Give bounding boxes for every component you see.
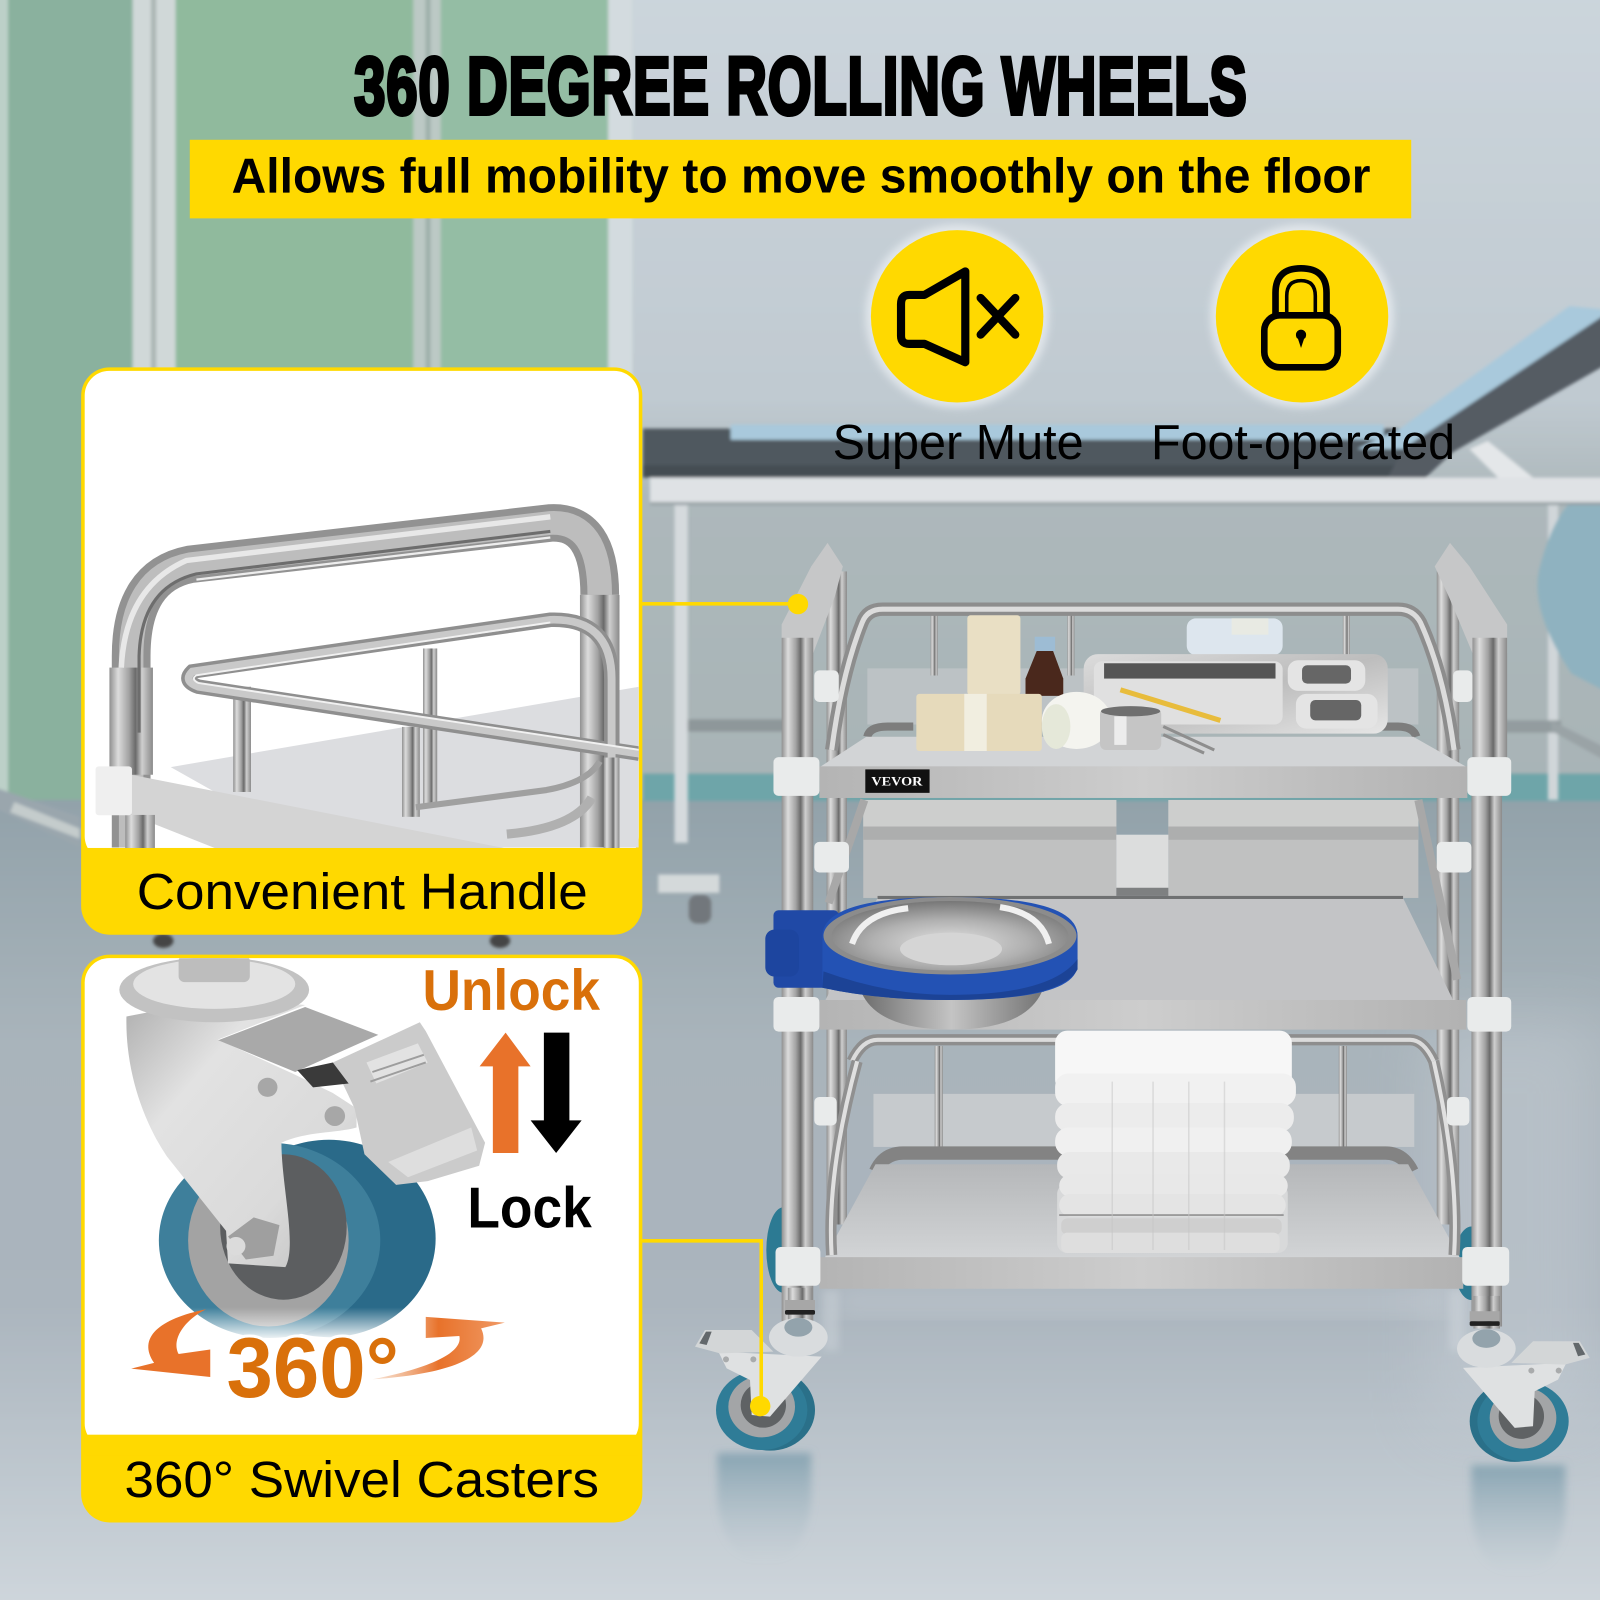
subtitle banner: Allows full mobility to move smoothly on the floor — [232, 149, 1370, 203]
gauze roll — [1042, 692, 1111, 749]
pack tag — [1232, 618, 1268, 635]
icon: padlock — [1210, 224, 1394, 408]
tray — [1084, 654, 1388, 734]
left handle — [782, 543, 843, 653]
caster photo — [119, 955, 505, 1379]
caption: Convenient Handle — [137, 863, 588, 920]
label: super mute: Super Mute — [833, 416, 1084, 470]
leader line: caster — [641, 1241, 770, 1416]
subtitle banner — [190, 140, 1411, 218]
saline pack — [1187, 618, 1283, 655]
leader line: handle — [641, 594, 808, 614]
caption: 360° Swivel Casters — [124, 1451, 599, 1508]
middle shelf — [819, 800, 1466, 1030]
steel cup — [1100, 706, 1161, 750]
floor light shading — [837, 1020, 1600, 1429]
floor reflections — [717, 1290, 1565, 1573]
tan bandage roll — [916, 694, 1042, 751]
background: examination table — [153, 306, 1600, 948]
bottle — [1026, 637, 1063, 696]
panel: convenient handle — [81, 367, 642, 935]
towels — [1055, 1031, 1296, 1253]
icon: super mute — [865, 224, 1049, 408]
swivel arrow right — [372, 1317, 505, 1379]
brand label — [865, 769, 930, 793]
upright bandage — [967, 615, 1020, 695]
tube clamps — [773, 670, 1511, 1286]
medical items — [916, 615, 1388, 753]
lower tier back panel and rails — [824, 1040, 1460, 1258]
blue bowl holder — [765, 897, 1078, 1030]
brand label: VEVOR — [871, 775, 923, 789]
title: 360 DEGREE ROLLING WHEELS — [354, 40, 1247, 131]
lock label: Lock — [467, 1177, 592, 1241]
trolley back posts — [827, 571, 1459, 1224]
top tier rails and shelf — [819, 609, 1467, 798]
right handle — [1435, 543, 1507, 653]
unlock label: Unlock — [422, 959, 600, 1023]
front posts — [782, 638, 1507, 1327]
tweezers — [1163, 727, 1214, 753]
handle photo — [96, 517, 639, 849]
panel: 360 swivel casters — [81, 955, 642, 1522]
trolley — [695, 543, 1590, 1462]
middle tier back panels — [863, 800, 1418, 898]
swivel arrow left — [131, 1309, 210, 1377]
360 degree label: 360° — [227, 1320, 399, 1416]
trolley back wheels — [766, 1207, 1489, 1300]
front casters — [695, 1288, 1590, 1462]
lock direction arrows — [480, 1033, 582, 1153]
label: foot-operated: Foot-operated — [1151, 416, 1455, 470]
bottom shelf front — [819, 1257, 1463, 1289]
swabs — [1120, 690, 1220, 720]
